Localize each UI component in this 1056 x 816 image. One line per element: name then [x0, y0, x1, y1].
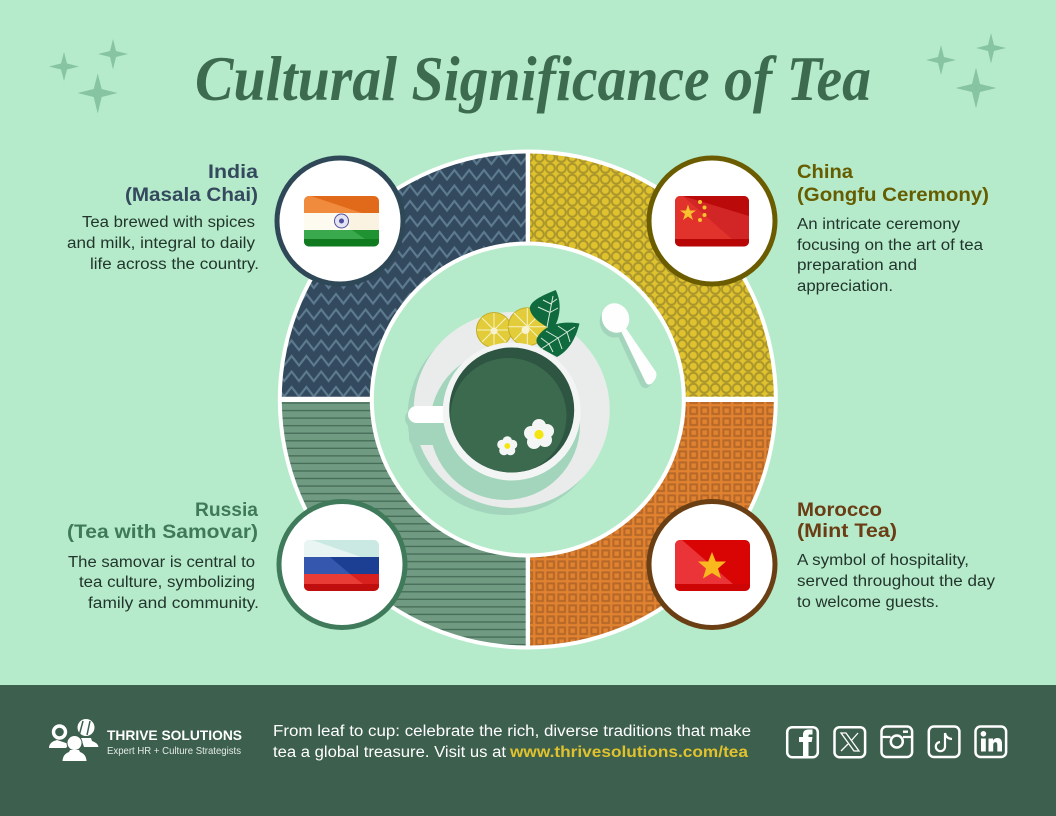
heading: Russia: [67, 500, 258, 543]
heading: Morocco: [797, 500, 897, 542]
heading: Morocco: Morocco: [797, 500, 882, 521]
text: China description: focusing on the art of tea: [797, 237, 983, 254]
icon: flower small: [497, 436, 517, 455]
segment: Russia: [282, 402, 526, 646]
heading: Russia: Russia: [195, 500, 258, 521]
heading: Morocco: (Mint Tea): [797, 521, 897, 542]
footer band: [0, 685, 1056, 816]
text: Morocco description: served throughout the day: [797, 573, 995, 590]
panel: Morocco: [797, 500, 995, 611]
icon: lemon slices: [476, 308, 546, 348]
text: India description: life across the country.: [90, 256, 259, 273]
text: call to action: From leaf to cup: celebrate the rich, diverse traditions that make: [273, 723, 751, 740]
center disc: [374, 246, 682, 554]
icon: India flag: [304, 196, 379, 246]
donut chart: [278, 150, 778, 650]
text: Morocco description: to welcome guests.: [797, 594, 939, 611]
icon: TikTok: [929, 726, 959, 757]
text: Russia description: [68, 554, 259, 612]
icon: Instagram: [882, 726, 912, 757]
heading: China: China: [797, 162, 853, 183]
text: call to action: [273, 723, 751, 761]
heading: Russia: (Tea with Samovar): [67, 522, 258, 543]
title: Cultural Significance of Tea: [195, 43, 871, 114]
segment: China: [530, 154, 774, 397]
saucer: [408, 312, 610, 515]
icon: Russia flag: [304, 540, 379, 591]
cup: [443, 342, 581, 480]
icon: flower large: [524, 419, 554, 449]
text: call to action: www.thrivesolutions.com/tea: [509, 744, 748, 761]
text: India description: [67, 214, 259, 273]
cup shadow: [405, 350, 580, 500]
text: Morocco description: [797, 552, 995, 611]
panel: India: [67, 162, 259, 273]
text: India description: and milk, integral to daily: [67, 235, 255, 252]
text: Russia description: tea culture, symbolizing: [79, 574, 255, 591]
badge: China: [649, 158, 775, 284]
heading: India: (Masala Chai): [125, 185, 258, 206]
text: Morocco description: A symbol of hospitality,: [797, 552, 969, 569]
badge: Russia: [279, 502, 405, 628]
icon: sparkles right: [926, 33, 1006, 108]
text: India description: Tea brewed with spices: [82, 214, 255, 231]
logo: [49, 719, 242, 761]
text: brand name: THRIVE SOLUTIONS: [107, 727, 242, 743]
icon: X: [834, 727, 865, 757]
icon: spoon: [595, 299, 656, 388]
text: China description: An intricate ceremony: [797, 216, 960, 233]
icon: Morocco flag: [675, 540, 750, 591]
text: Russia description: family and community.: [88, 595, 259, 612]
text: call to action: tea a global treasure. Visit us at: [273, 744, 507, 761]
icon: people: [49, 719, 98, 761]
icon: sparkles left: [49, 39, 128, 114]
icon: China flag: [675, 196, 749, 246]
badge: India: [277, 158, 403, 284]
icon: tea leaves: [530, 290, 580, 357]
icon: LinkedIn: [976, 726, 1006, 757]
text: China description: preparation and: [797, 257, 917, 274]
text: brand tagline: Expert HR + Culture Strategists: [107, 745, 241, 757]
heading: India: India: [208, 162, 258, 183]
icon: Facebook: [787, 727, 818, 758]
heading: China: [797, 162, 989, 206]
badge: Morocco: [649, 502, 775, 628]
text: Russia description: The samovar is central to: [68, 554, 255, 571]
panel: China: [797, 162, 989, 295]
panel: Russia: [67, 500, 259, 612]
cup handle: [408, 406, 452, 423]
heading: China: (Gongfu Ceremony): [797, 185, 989, 206]
illustration: tea cup: [405, 290, 656, 515]
text: China description: appreciation.: [797, 278, 893, 295]
heading: India: [125, 162, 258, 206]
segment: India: [282, 154, 526, 397]
text: China description: [797, 216, 983, 295]
segment: Morocco: [530, 402, 774, 646]
